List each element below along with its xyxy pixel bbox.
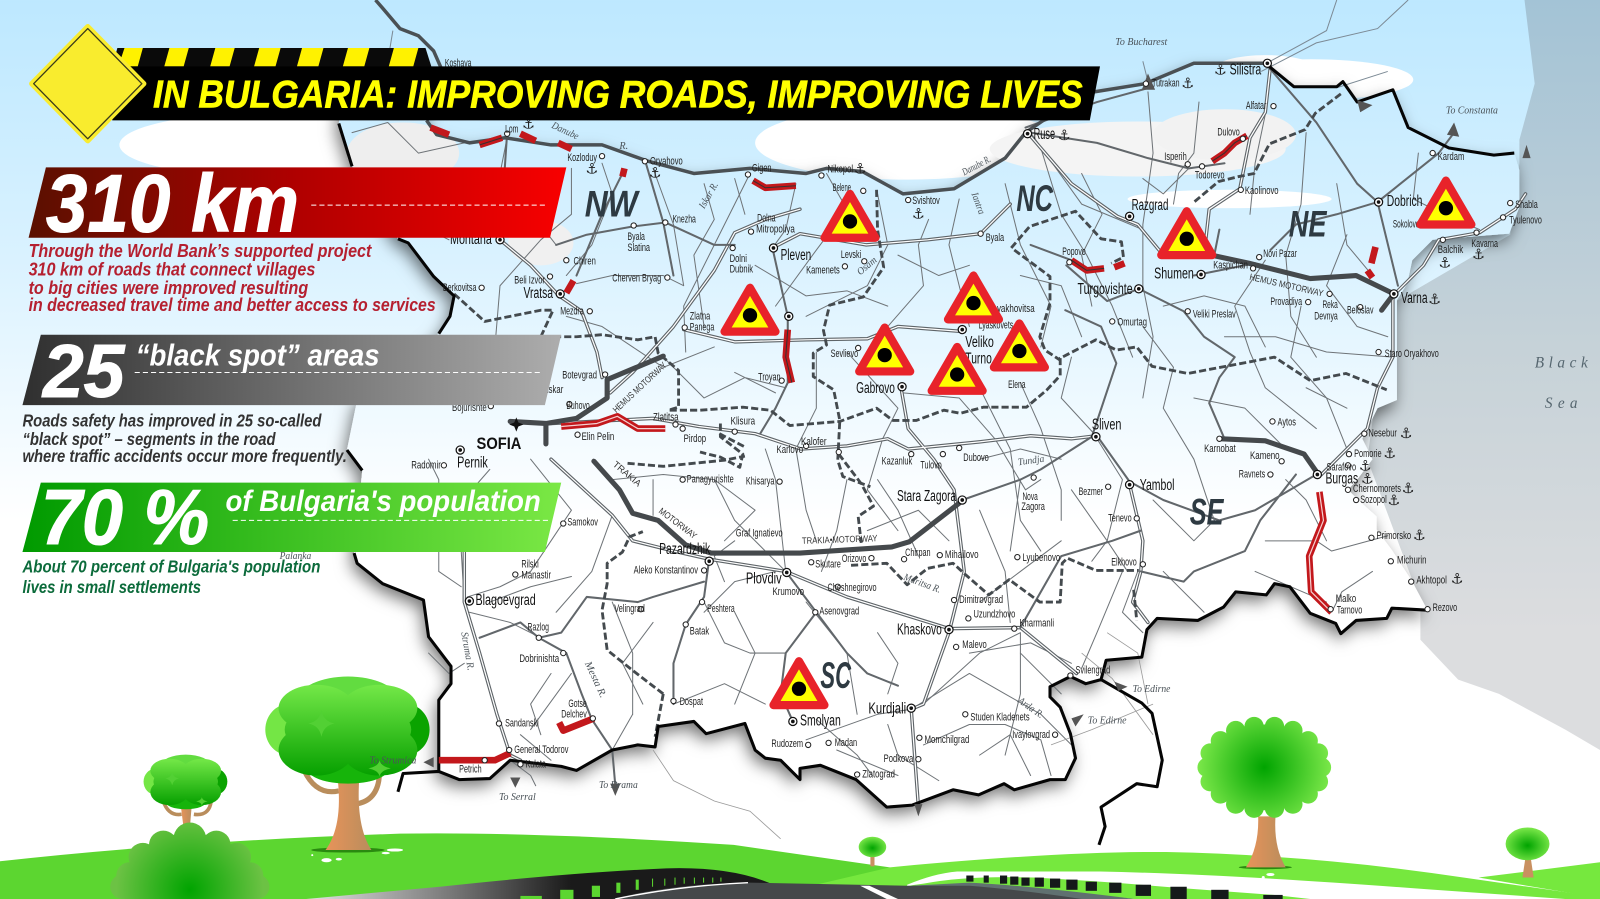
major city labels: Razgrad: [1132, 197, 1168, 214]
panel: 25 black spot areas: [22, 330, 561, 466]
destination and river labels: Maritsa R.: [901, 572, 942, 596]
small town labels: Aytos: [1278, 417, 1296, 429]
anchor icons: ⚓: [1387, 493, 1400, 509]
small tree middle: [859, 837, 886, 866]
small town labels: Elena: [1008, 379, 1026, 391]
small town labels: Khisarya: [746, 476, 775, 488]
small town labels: Batak: [690, 626, 709, 638]
small town labels: Delchev: [561, 708, 587, 720]
destination and river labels: [279, 37, 1498, 803]
small town labels: Manastir: [521, 570, 551, 582]
small town labels: Dulovo: [1217, 127, 1240, 139]
major city markers: [456, 59, 1398, 726]
band heading: “black spot” areas: [136, 338, 380, 372]
major city labels: Pleven: [781, 247, 811, 264]
small town labels: Panega: [690, 322, 715, 334]
motorway labels: HEMUS MOTORWAY: [611, 360, 668, 415]
small town labels: Kalofer: [801, 436, 827, 448]
small town labels: Shabla: [1515, 199, 1538, 211]
major city labels: Yambol: [1140, 477, 1174, 494]
destination and river labels: R.: [618, 141, 628, 152]
small town labels: Kameno: [1250, 450, 1280, 462]
description: 310 km of roads that connect villages: [29, 259, 315, 280]
small town labels: Svilengrad: [1076, 664, 1110, 676]
small town labels: Oryahovo: [650, 155, 683, 167]
small town labels: Michurin: [1397, 554, 1427, 566]
small town labels: Beli Izvor: [514, 275, 545, 287]
small town labels: Beloslav: [1347, 304, 1374, 316]
destination and river labels: Mesta R.: [582, 659, 608, 700]
major city labels: Silistra: [1230, 61, 1262, 78]
small town labels: Dimitrovgrad: [959, 594, 1003, 606]
clouds behind map: [119, 55, 1413, 180]
green band: [22, 483, 561, 552]
band heading: of Bulgaria's population: [226, 485, 541, 518]
major city labels: Ruse: [1034, 126, 1055, 143]
anchor icons: ⚓: [649, 166, 662, 182]
motorway labels: MOTORWAY: [657, 506, 699, 541]
small town labels: Slatina: [628, 242, 650, 254]
small town labels: Koshava: [445, 57, 472, 69]
description: About 70 percent of Bulgaria's population: [22, 556, 320, 576]
romanian roads and rivers: [388, 0, 1408, 88]
figure 70 %: 70 %: [41, 475, 209, 561]
major city labels: Gabrovo: [856, 380, 895, 397]
small town labels: Lyubenovo: [1022, 552, 1060, 564]
pale clouds over northern map: [347, 109, 1332, 265]
anchor icons: ⚓: [522, 117, 535, 133]
black sea: [1367, 0, 1600, 750]
description: where traffic accidents occur more frequently.: [22, 446, 347, 466]
motorway labels: TRAKIA•MOTORWAY: [802, 533, 878, 546]
anchor icons: ⚓: [1181, 76, 1194, 92]
region labels: SE: [1190, 492, 1225, 533]
dashed regional boundaries: [454, 94, 1387, 737]
small town labels: Podkova: [884, 753, 914, 765]
black national border: [339, 63, 1514, 845]
small town labels: Tenevo: [1108, 512, 1132, 524]
small town labels: Zlatna: [690, 310, 711, 322]
major city labels: Smolyan: [800, 713, 841, 730]
region labels: NC: [1016, 178, 1053, 219]
black sea label: Sea: [1545, 395, 1578, 412]
small town labels: Troyan: [758, 372, 781, 384]
title: IN BULGARIA: IMPROVING ROADS, IMPROVING LIVES: [153, 74, 1083, 117]
destination and river labels: Danube: [549, 120, 581, 143]
major city labels: Vratsa: [523, 285, 553, 302]
red band: [29, 167, 566, 238]
description: to big cities were improved resulting: [29, 277, 308, 298]
description: [22, 556, 320, 597]
small town labels: Primorsko: [1377, 530, 1411, 542]
major city labels: Plovdiv: [746, 571, 782, 588]
major city labels: Shumen: [1154, 266, 1194, 283]
anchor icons: ⚓: [1438, 255, 1451, 271]
secondary roads: [480, 63, 1454, 786]
small town labels: Provadiya: [1270, 296, 1303, 308]
anchor icons: ⚓: [912, 206, 925, 222]
thin greek and turkish roads: [653, 633, 1153, 839]
major city labels: Pazardzhik: [659, 541, 710, 558]
small town labels: Sokolovo: [1393, 219, 1419, 231]
small town labels: Sandanski: [505, 718, 539, 730]
small town labels: Momchilgrad: [924, 734, 969, 746]
improved roads in red: [431, 128, 1376, 760]
small town labels: Cheshnegirovo: [828, 582, 877, 594]
major city labels: SOFIA: [477, 435, 522, 453]
anchor icons: ⚓: [1383, 446, 1396, 462]
major city labels: Pernik: [457, 454, 488, 471]
major city labels: Dobrich: [1387, 193, 1422, 210]
region labels: NW: [585, 183, 641, 224]
small town labels: Krumovo: [772, 586, 804, 598]
small town labels: Chiren: [573, 255, 596, 267]
destination and river labels: Iskar R.: [697, 180, 721, 211]
small town labels: Cherven Bryag: [612, 273, 661, 285]
small tree right: [1506, 828, 1549, 878]
small town labels: Karlovo: [777, 444, 803, 456]
white verge under hill: [907, 871, 1565, 899]
small town labels: Tutrakan: [1152, 78, 1180, 90]
major city labels: Veliko: [965, 334, 994, 351]
right tree: [1197, 717, 1331, 869]
motorway labels: [611, 272, 1324, 546]
black sea label: Black: [1535, 354, 1589, 371]
region labels: [585, 178, 1328, 696]
anchor icons: ⚓: [1058, 128, 1071, 144]
small town labels: Knezha: [672, 213, 696, 225]
description: Through the World Bank’s supported project: [29, 240, 372, 261]
small town labels: Zagora: [1021, 501, 1045, 513]
small town labels: Graf Ignatievo: [736, 528, 783, 540]
destination and river labels: To Constanta: [1446, 105, 1498, 116]
black spot warning signs: [724, 181, 1471, 705]
description: lives in small settlements: [22, 577, 201, 597]
anchor icons: ⚓: [585, 161, 598, 177]
anchor icons: ⚓: [1472, 247, 1485, 263]
small town labels: Madan: [835, 737, 857, 749]
figure 310 km: 310 km: [46, 159, 299, 250]
major city labels: Khaskovo: [897, 622, 942, 639]
panel: 70 percent: [22, 475, 561, 597]
small town labels: Rudozem: [771, 738, 803, 750]
small town labels: Mihailovo: [945, 549, 979, 561]
small town labels: Nesebur: [1368, 428, 1397, 440]
small town labels: Kaspichan: [1213, 259, 1248, 271]
black sea label: [1535, 354, 1589, 412]
small town labels: Sozopol: [1360, 494, 1387, 506]
small town labels: Dobrinishta: [519, 653, 560, 665]
small town labels: Nikopol: [828, 163, 853, 175]
major city labels: Turgovishte: [1078, 281, 1133, 298]
major city labels: Sliven: [1092, 417, 1121, 434]
major city labels: Burgas: [1326, 471, 1358, 488]
small town labels: Byala: [628, 231, 645, 243]
anchor icons: ⚓: [1428, 292, 1441, 308]
anchor icons: ⚓: [1402, 481, 1415, 497]
anchor icons: [522, 62, 1485, 588]
green hills: [0, 833, 1600, 899]
small town labels: Zlatitsa: [653, 411, 679, 423]
small town labels: Samokov: [567, 517, 598, 529]
major city labels: [450, 62, 1428, 730]
small town labels: Ivaylovgrad: [1012, 729, 1050, 741]
small town labels: Ravnets: [1239, 469, 1266, 481]
small town labels: Studen Kladenets: [970, 711, 1030, 723]
anchor icons: ⚓: [854, 161, 867, 177]
small town labels: iskar: [547, 384, 563, 396]
small town labels: Dubovo: [963, 452, 989, 464]
small town labels: Belene: [833, 182, 851, 194]
destination and river labels: To Drama: [599, 780, 638, 791]
destination and river labels: Palanka: [279, 551, 311, 562]
small town labels: Tyulenovo: [1509, 214, 1542, 226]
small town labels: Razlog: [528, 622, 549, 634]
danube river border: [376, 0, 1265, 194]
minor roads network: [352, 92, 1480, 786]
major city labels: Turno: [965, 350, 992, 367]
destination and river labels: Osam: [855, 255, 879, 278]
description: Roads safety has improved in 25 so-called: [22, 411, 322, 431]
destination and river labels: To Serral: [499, 792, 536, 803]
destination and river labels: To Edirne: [1133, 684, 1171, 695]
small town labels: Pirdop: [684, 433, 706, 445]
road side barrier left: [520, 878, 721, 899]
small town labels: Omurtag: [1117, 317, 1147, 329]
small town labels: Klisura: [731, 416, 756, 428]
dashed rule: [311, 204, 548, 206]
road side barrier right: [908, 876, 1310, 899]
major city labels: Montana: [450, 231, 492, 248]
major city labels: Blagoevgrad: [476, 592, 536, 609]
small town labels: yakhovitsa: [997, 303, 1035, 315]
anchor icons: ⚓: [1400, 426, 1413, 442]
small town labels: Kamenets: [806, 264, 840, 276]
small town labels: Gotse: [568, 698, 587, 710]
anchor icons: ⚓: [1361, 472, 1374, 488]
small town labels: Kharmanli: [1019, 618, 1054, 630]
small town labels: Kazanluk: [882, 455, 913, 467]
major city labels: Stara Zagora: [897, 488, 956, 505]
map land with shadow: [339, 63, 1519, 807]
small town labels: Nova: [1022, 491, 1038, 503]
small town labels: Reka: [1322, 299, 1338, 311]
destination and river labels: To Bucharest: [1115, 37, 1168, 48]
small town labels: Kozloduy: [567, 152, 597, 164]
road direction arrows: [423, 73, 1531, 816]
description: [29, 240, 436, 315]
small town labels: Svishtov: [912, 195, 940, 207]
small town labels: Kaolinovo: [1245, 185, 1279, 197]
small town labels: Bojurishte: [452, 402, 487, 414]
yellow diamond sign: [32, 27, 144, 141]
small town labels: Tarnovo: [1337, 604, 1362, 616]
small town labels: Staro Oryakhovo: [1385, 348, 1439, 360]
small tree left: [144, 755, 227, 829]
motorway labels: HEMUS MOTORWAY: [1249, 272, 1324, 299]
anchor icons: ⚓: [1413, 528, 1426, 544]
small town labels: [411, 57, 1542, 781]
small town labels: Malko: [1336, 593, 1356, 605]
small town labels: Karnobat: [1204, 443, 1236, 455]
small town labels: Dolni: [730, 253, 747, 265]
small town labels: Devnya: [1314, 310, 1338, 322]
major city labels: Varna: [1401, 290, 1428, 307]
small town labels: Gigen: [752, 162, 771, 174]
region labels: SC: [820, 655, 851, 696]
small town labels: Byala: [986, 232, 1005, 244]
small town labels: Sevlievo: [831, 348, 858, 360]
anchor icons: ⚓: [1451, 572, 1464, 588]
small town labels: Tulovo: [920, 459, 942, 471]
hazard stripe strip: [112, 48, 432, 67]
small town labels: Skutare: [815, 558, 841, 570]
small town labels: Malevo: [962, 639, 987, 651]
small town labels: Peshtera: [707, 603, 735, 615]
small town labels: Dolna: [757, 212, 776, 224]
destination and river labels: Arda R.: [1015, 695, 1045, 721]
small town labels: Balchik: [1438, 244, 1464, 256]
small town labels: Kardam: [1438, 151, 1464, 163]
small town labels: Radomir: [411, 459, 441, 471]
description: in decreased travel time and better access to services: [29, 294, 436, 315]
small town labels: Popovo: [1062, 246, 1086, 258]
small town labels: Petrich: [459, 763, 482, 775]
big tree: [265, 677, 430, 853]
anchor icons: ⚓: [1214, 62, 1227, 78]
small town labels: Novi Pazar: [1263, 248, 1297, 260]
small town labels: Botevgrad: [562, 370, 597, 382]
destination and river labels: Danube R.: [960, 154, 993, 178]
small town labels: Mezdra: [560, 305, 584, 317]
small town labels: Rezovo: [1433, 602, 1457, 614]
capital star marker: [509, 417, 523, 432]
destination and river labels: Struma R.: [458, 631, 476, 671]
small town labels: Chirpan: [905, 547, 931, 559]
destination and river labels: To Edirne: [1088, 715, 1127, 726]
dashed rule: [233, 519, 548, 521]
figure 25: 25: [41, 330, 125, 414]
small town labels: Orizovo: [842, 553, 866, 565]
description: [22, 411, 347, 466]
title banner: [32, 27, 1100, 141]
motorways: [510, 250, 1394, 553]
major city labels: Kurdjali: [868, 700, 906, 717]
small town labels: Pomorie: [1354, 448, 1382, 460]
small town labels: Uzundzhovo: [973, 608, 1015, 620]
destination and river labels: Tundja: [1017, 454, 1045, 468]
destination and river labels: Iantra: [968, 190, 987, 216]
small town labels: Zlatograd: [862, 769, 895, 781]
small town labels: General Todorov: [514, 744, 569, 756]
small town labels: Asenovgrad: [819, 605, 859, 617]
small town labels: Veliki Preslav: [1193, 308, 1236, 320]
small town labels: Bezmer: [1079, 486, 1103, 498]
small town labels: Dubnik: [730, 263, 753, 275]
small town labels: Velingrad: [614, 603, 645, 615]
dashed rule: [135, 371, 543, 373]
road tarmac: [612, 883, 1133, 899]
small town labels: Berkovitsa: [443, 282, 477, 294]
small town labels: Akhtopol: [1416, 575, 1447, 587]
small town labels: Elin Pelin: [582, 431, 614, 443]
small town labels: Todorevo: [1195, 170, 1224, 182]
small town labels: Panagyurishte: [687, 474, 734, 486]
small town labels: Lom: [505, 124, 518, 136]
motorway labels: TRAKIA: [611, 459, 644, 489]
small town labels: Kulata: [526, 758, 546, 770]
small town labels: Mitropoliya: [756, 224, 795, 236]
small town labels: Dospat: [680, 696, 704, 708]
city markers: [441, 81, 1513, 777]
bush: [110, 822, 269, 899]
small town labels: Aleko Konstantinov: [634, 564, 698, 576]
small town labels: Levski: [841, 249, 861, 261]
anchor icons: ⚓: [1359, 458, 1372, 474]
main double roads: [464, 66, 1526, 806]
small town labels: Kavarna: [1471, 238, 1498, 250]
major city marker dots: [458, 61, 1396, 723]
small town labels: Rilski: [521, 558, 539, 570]
small town labels: Elkhovo: [1111, 556, 1137, 568]
small town labels: Isperih: [1164, 151, 1187, 163]
description: “black spot” – segments in the road: [22, 429, 276, 449]
small town labels: Alfatar: [1246, 100, 1266, 112]
white blobs on grass: [311, 848, 1274, 879]
black title bar: [112, 66, 1100, 120]
road left with black curve: [306, 868, 776, 899]
panel: 310 km: [29, 159, 566, 315]
small town labels: Buhovo: [566, 400, 590, 412]
main road inner casing: [464, 66, 1526, 806]
small town labels: Chernomorets: [1353, 483, 1401, 495]
gray band: [22, 335, 561, 405]
region labels: NE: [1289, 204, 1328, 245]
destination and river labels: To Strumica: [369, 755, 416, 766]
small town labels: Lyaskovets: [979, 320, 1013, 332]
small town labels: Sarafovo: [1327, 461, 1356, 473]
